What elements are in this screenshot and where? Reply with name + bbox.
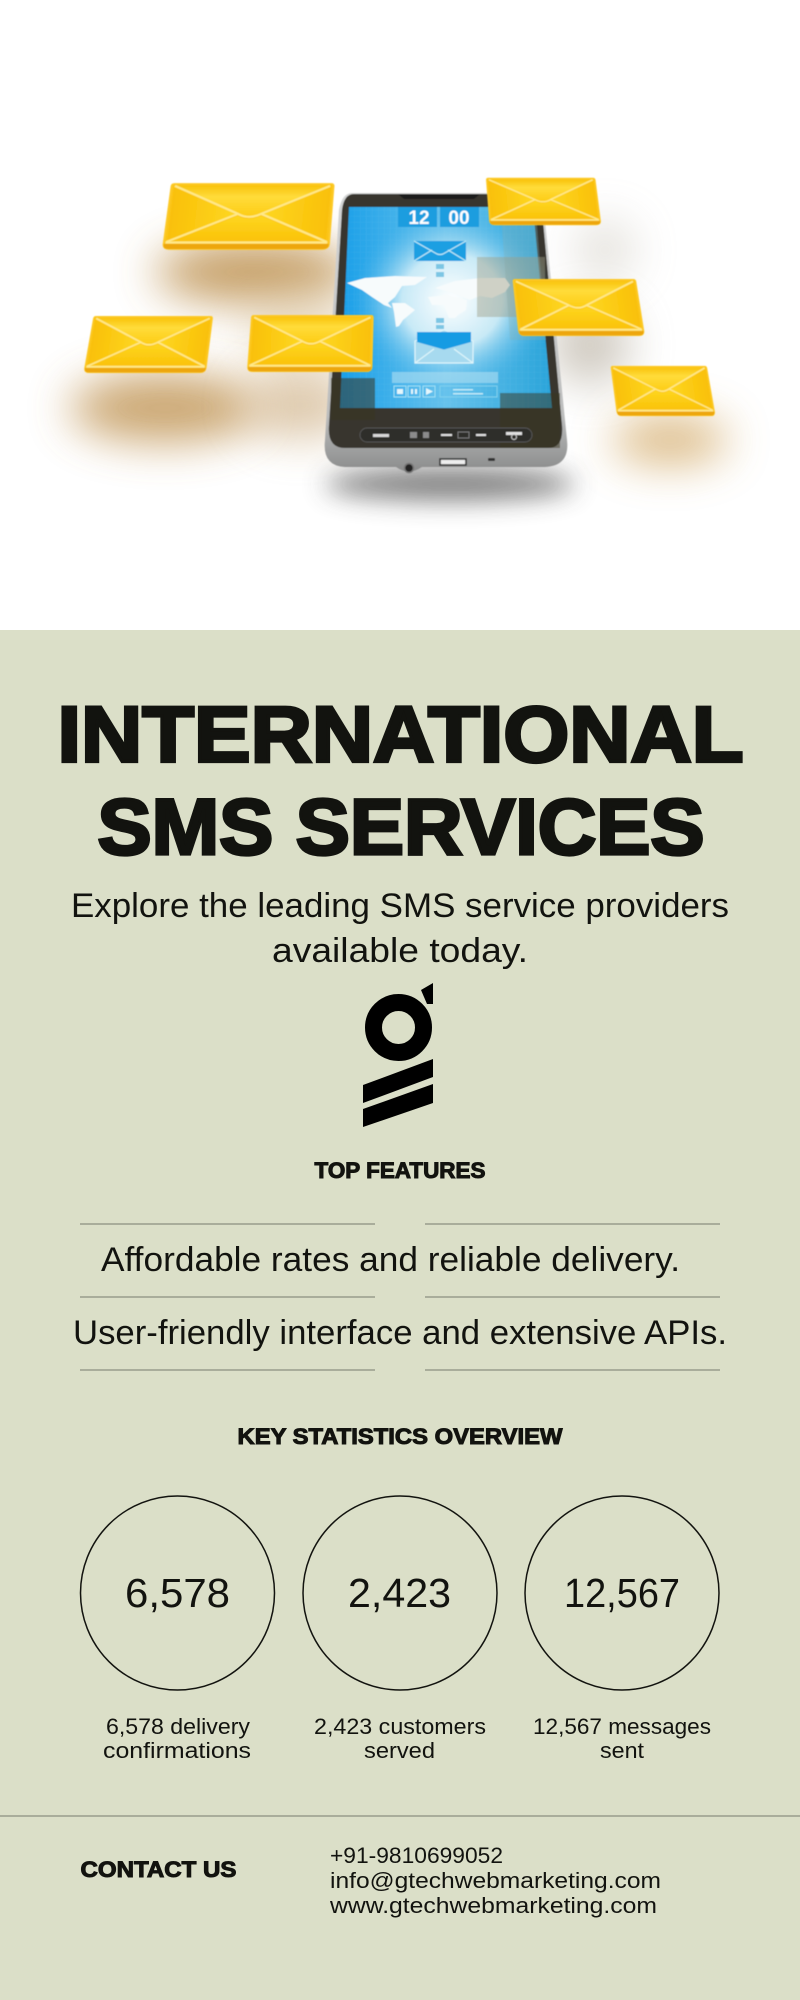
media controls [394, 386, 497, 397]
icon: logo [363, 983, 433, 1127]
stat: messages sent: sent [600, 1738, 645, 1763]
icon: clock tiles: 00 [448, 208, 470, 229]
contact details: +91-9810699052 [330, 1843, 503, 1868]
subtitle: available today. [272, 932, 528, 970]
soft shadows [70, 220, 728, 500]
envelope on screen [415, 330, 473, 363]
title [58, 690, 743, 871]
heading: top features: TOP FEATURES [314, 1158, 486, 1183]
heading: contact us: CONTACT US [80, 1857, 237, 1882]
world map [347, 276, 510, 327]
heading: key statistics: KEY STATISTICS OVERVIEW [238, 1424, 563, 1449]
stat: delivery confirmations: confirmations [103, 1738, 251, 1763]
stat: customers served: served [364, 1738, 435, 1763]
stat: customers served [303, 1496, 497, 1763]
panel: content background [0, 630, 800, 2000]
title: SMS SERVICES [98, 782, 704, 871]
stat: delivery confirmations [80, 1496, 274, 1763]
mail icon on screen [414, 241, 466, 277]
icon: envelopes [84, 178, 715, 416]
contact details: www.gtechwebmarketing.com [329, 1893, 657, 1918]
phone buttons [360, 428, 532, 442]
feature list [73, 1224, 727, 1370]
stat: customers served: 2,423 customers [314, 1714, 486, 1739]
contact details: info@gtechwebmarketing.com [330, 1868, 661, 1893]
feature list: User-friendly interface and extensive APIs. [73, 1314, 727, 1352]
stat: messages sent [525, 1496, 719, 1763]
feature list: Affordable rates and reliable delivery. [101, 1241, 680, 1279]
stat: messages sent: 12,567 [564, 1570, 680, 1616]
icon: clock tiles [398, 207, 479, 229]
stat: delivery confirmations: 6,578 delivery [106, 1714, 251, 1739]
stat: delivery confirmations: 6,578 [125, 1570, 230, 1616]
title: INTERNATIONAL [58, 690, 743, 778]
subtitle [71, 887, 729, 970]
stat: customers served: 2,423 [348, 1570, 451, 1616]
subtitle: Explore the leading SMS service providers [71, 887, 729, 925]
icon: smartphone [325, 193, 567, 472]
contact details [329, 1843, 661, 1918]
icon: clock tiles: 12 [408, 208, 430, 229]
stat: messages sent: 12,567 messages [533, 1714, 711, 1739]
hero illustration: phone with envelopes [0, 0, 800, 630]
